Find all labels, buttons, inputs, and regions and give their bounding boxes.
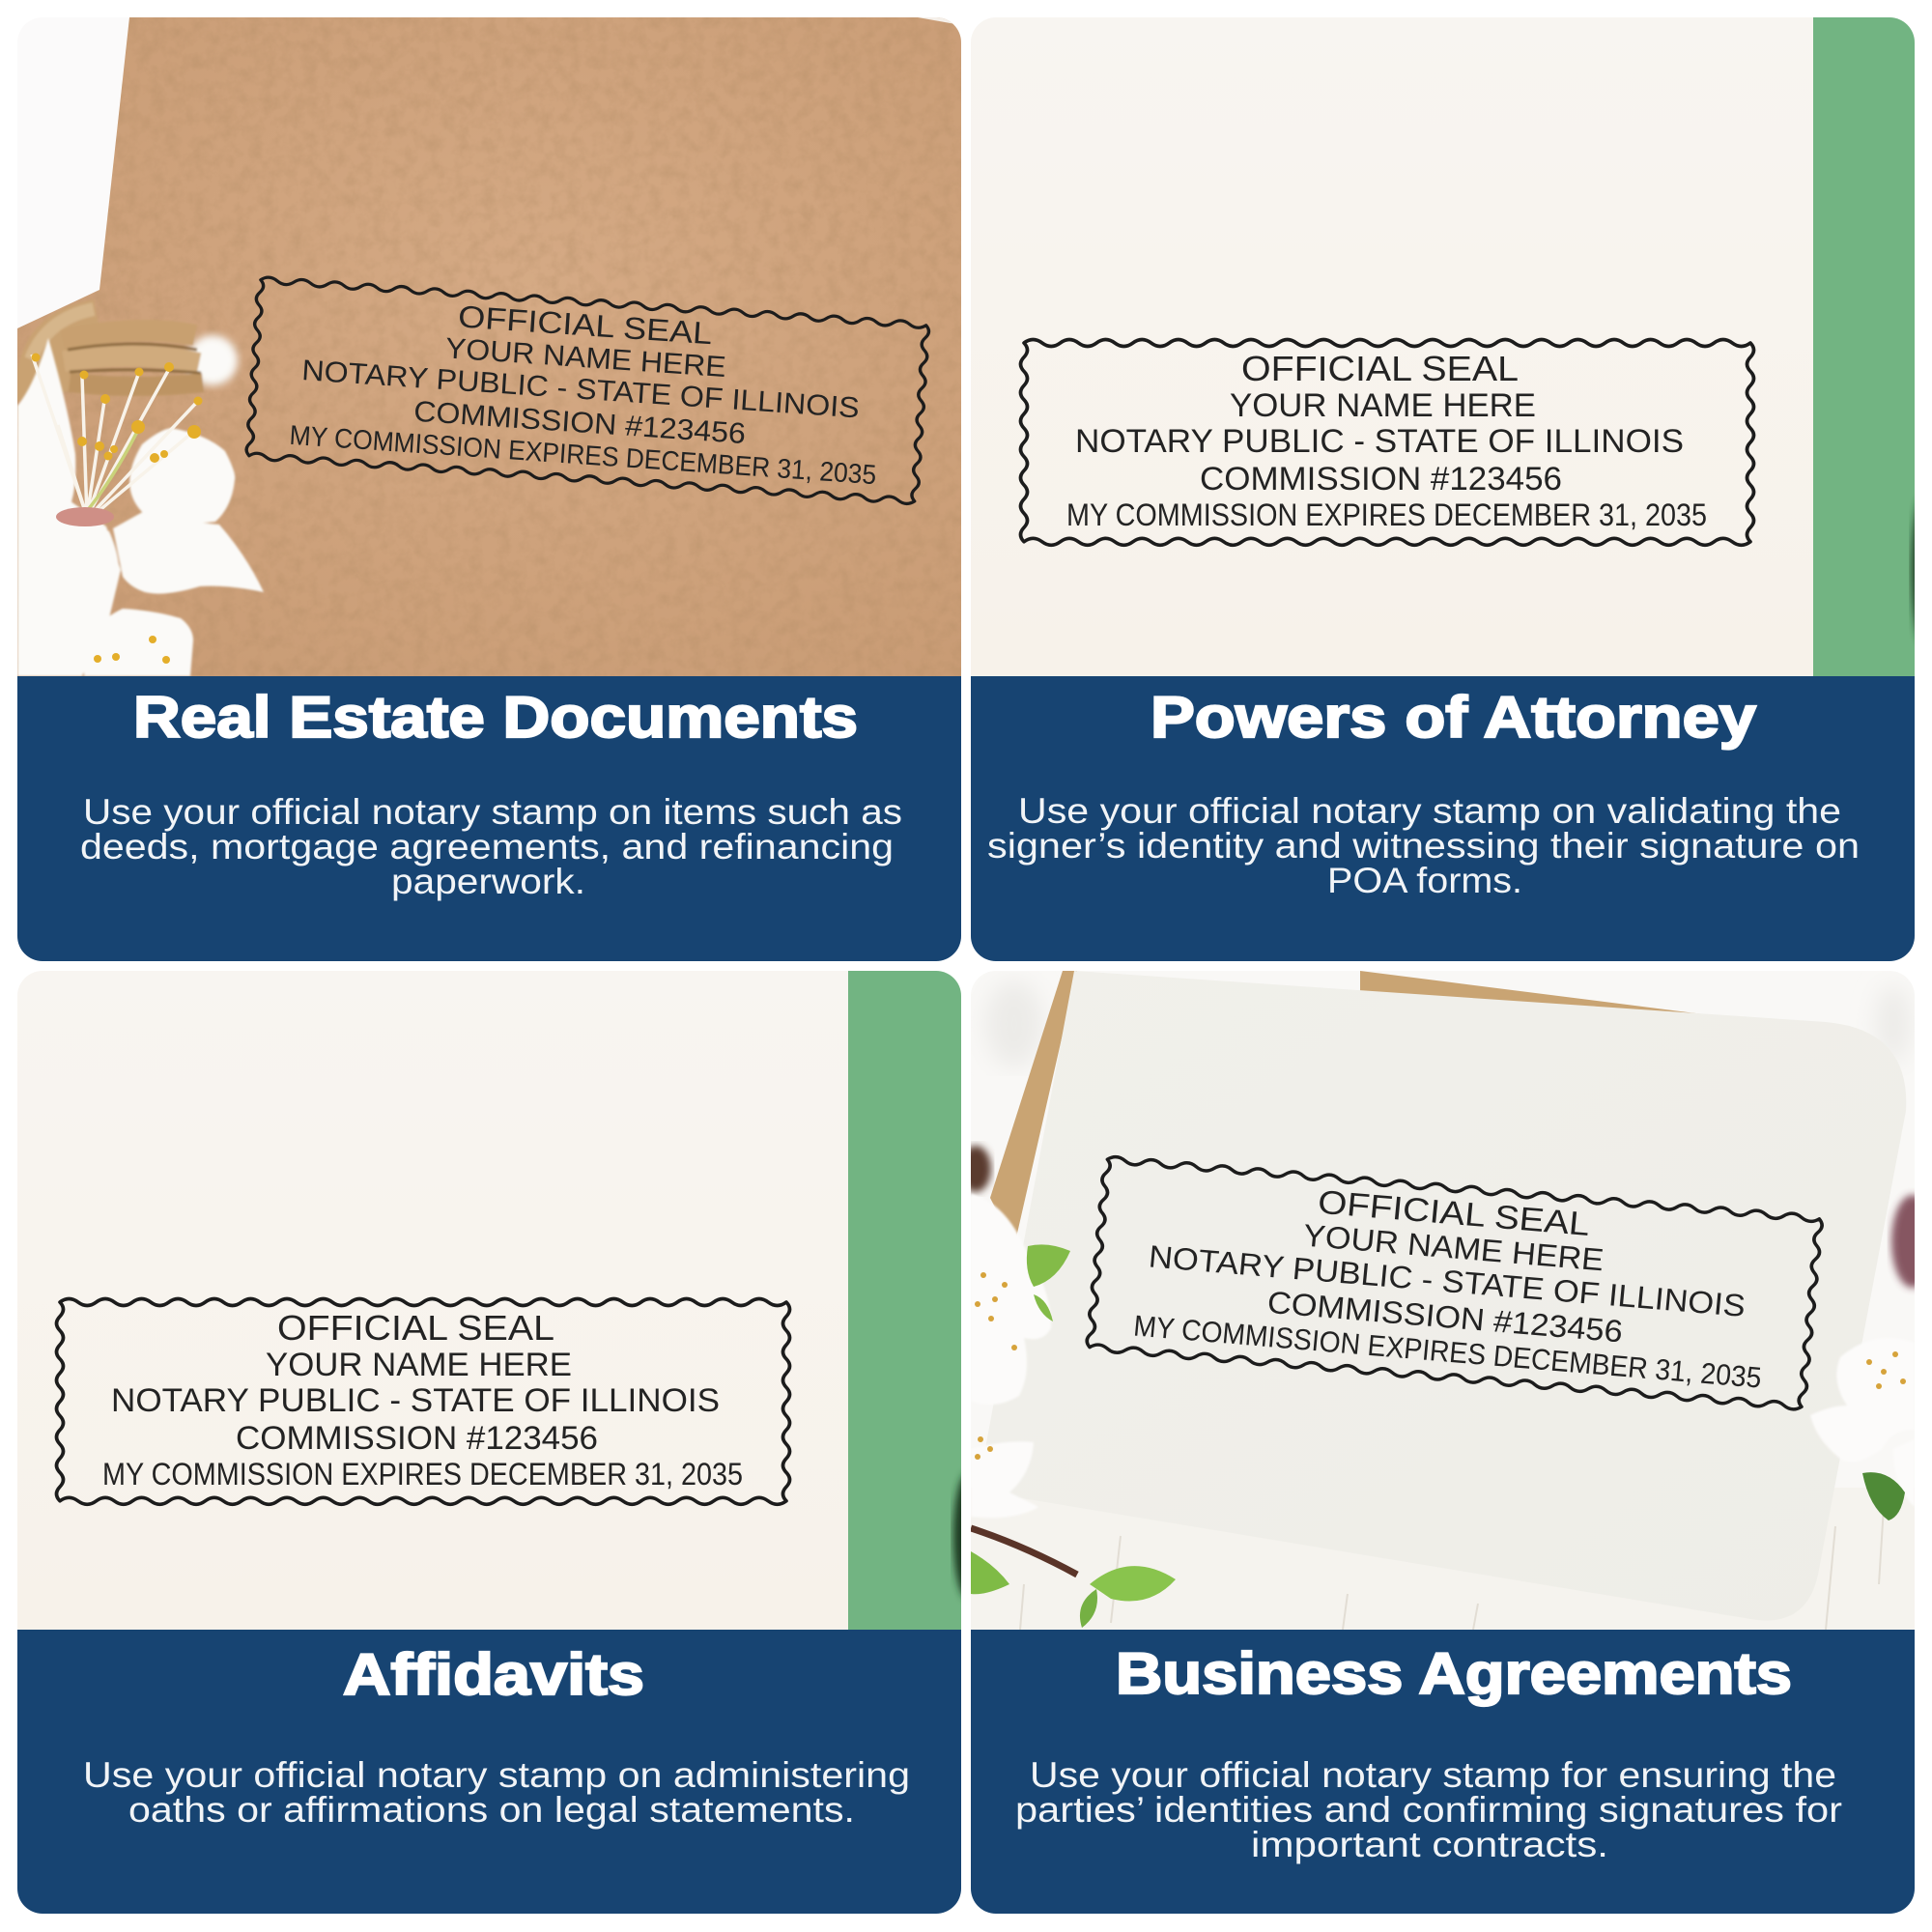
- description: signer’s identity and witnessing their signature on: [987, 826, 1860, 866]
- panel: real estate documents: [17, 17, 961, 961]
- twine and punch hole: [17, 299, 238, 401]
- stamp impression: straight: YOUR NAME HERE: [266, 1347, 572, 1383]
- stamp impression: angled on card: COMMISSION #123456: [1266, 1284, 1624, 1349]
- stamp impression: angled on card: YOUR NAME HERE: [1302, 1217, 1605, 1277]
- blossom stamens: [31, 354, 203, 664]
- photo: cream paper on green: [17, 971, 982, 1630]
- kraft envelope: [990, 971, 1795, 1246]
- description: POA forms.: [1327, 861, 1522, 900]
- panel: affidavits: [17, 971, 982, 1914]
- stamp impression: angled on card: NOTARY PUBLIC - STATE OF ILLINOIS: [1148, 1238, 1747, 1323]
- right blossom stamens: [1866, 1351, 1906, 1389]
- stamp impression: angled on card: OFFICIAL SEAL: [1317, 1184, 1591, 1243]
- stamp impression: straight: NOTARY PUBLIC - STATE OF ILLINOIS: [1075, 423, 1684, 460]
- photo: cream paper on green: [971, 17, 1932, 676]
- description: parties’ identities and confirming signatures for: [1015, 1790, 1842, 1830]
- caption block: [17, 676, 961, 961]
- description: [988, 797, 1857, 893]
- description: important contracts.: [1251, 1825, 1608, 1864]
- description: [80, 792, 902, 901]
- stamp impression: straight: MY COMMISSION EXPIRES DECEMBER 31, 2035: [102, 1457, 743, 1492]
- stamp impression: straight: COMMISSION #123456: [236, 1420, 598, 1457]
- caption block: [17, 1630, 961, 1914]
- right maroon background: [1891, 1195, 1932, 1288]
- stamp impression: straight: [56, 1298, 789, 1504]
- right blossoms: [1810, 1338, 1915, 1507]
- stamp impression: straight: MY COMMISSION EXPIRES DECEMBER 31, 2035: [1066, 497, 1707, 532]
- panel: business agreements: [960, 971, 1932, 1914]
- stamp impression: angled on kraft: COMMISSION #123456: [412, 394, 747, 450]
- stamp impression: angled on kraft: NOTARY PUBLIC - STATE OF ILLINOIS: [300, 354, 861, 424]
- stamp impression: angled on card: [1086, 1156, 1823, 1410]
- panel: powers of attorney: [971, 17, 1932, 961]
- stamp impression: straight: YOUR NAME HERE: [1230, 387, 1536, 424]
- heading: Powers of Attorney: [1151, 685, 1757, 750]
- description: Use your official notary stamp on validating the: [1018, 791, 1841, 831]
- description: [1015, 1755, 1842, 1864]
- stamp impression: straight: COMMISSION #123456: [1200, 461, 1562, 497]
- description: Use your official notary stamp on administering: [83, 1755, 910, 1795]
- photo: card on envelope with blossoms: [960, 971, 1932, 1630]
- description: [83, 1755, 910, 1830]
- description: paperwork.: [391, 862, 585, 901]
- wood table: [971, 1488, 1915, 1630]
- stamp impression: angled on kraft: MY COMMISSION EXPIRES DECEMBER 31, 2035: [289, 420, 877, 491]
- left leaves and twig: [971, 1244, 1176, 1628]
- heading: Affidavits: [343, 1642, 644, 1707]
- soft background blossoms: [985, 980, 1911, 1067]
- description: Use your official notary stamp on items such as: [83, 792, 902, 832]
- right leaf: [1862, 1472, 1905, 1520]
- stamp impression: straight: [1020, 340, 1753, 545]
- description: Use your official notary stamp for ensuring the: [1030, 1755, 1836, 1795]
- stamp impression: straight: OFFICIAL SEAL: [1241, 349, 1519, 388]
- stamp impression: angled on card: MY COMMISSION EXPIRES DECEMBER 31, 2035: [1132, 1309, 1763, 1395]
- heading: Real Estate Documents: [133, 685, 858, 750]
- description: deeds, mortgage agreements, and refinancing: [80, 827, 894, 867]
- stamp impression: angled on kraft: OFFICIAL SEAL: [457, 299, 713, 351]
- stamp impression: straight: OFFICIAL SEAL: [277, 1308, 554, 1348]
- rounded card: [982, 971, 1906, 1621]
- left dark background: [960, 1146, 991, 1192]
- caption block: [971, 676, 1915, 961]
- left blossoms: [971, 1194, 1051, 1518]
- caption block: [971, 1630, 1915, 1914]
- left blossom stamens: [975, 1272, 1017, 1460]
- description: oaths or affirmations on legal statements.: [128, 1790, 855, 1830]
- stamp impression: angled on kraft: [246, 276, 929, 504]
- photo: kraft paper with blossom: [17, 17, 961, 676]
- heading: Business Agreements: [1116, 1641, 1792, 1706]
- stamp impression: angled on kraft: YOUR NAME HERE: [444, 331, 727, 384]
- stamp impression: straight: NOTARY PUBLIC - STATE OF ILLINOIS: [111, 1382, 720, 1419]
- blossom petals: [17, 338, 264, 676]
